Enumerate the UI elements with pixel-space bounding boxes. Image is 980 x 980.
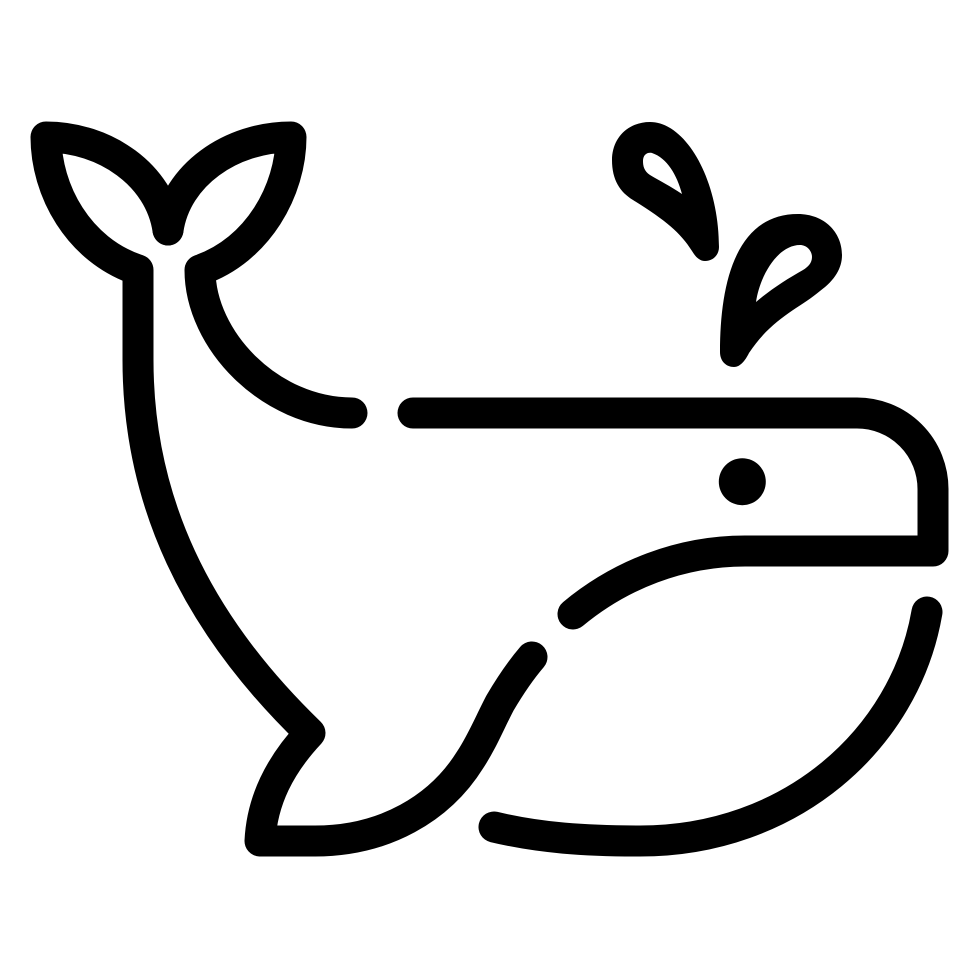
eye (719, 458, 766, 505)
left water drop (612, 122, 719, 261)
tail right lobe and back curve (168, 137, 352, 413)
right water drop (720, 214, 842, 367)
lower jaw belly (494, 612, 927, 841)
top of head, snout and mouth (413, 413, 933, 614)
tail left lobe and whale body outline (46, 137, 532, 841)
